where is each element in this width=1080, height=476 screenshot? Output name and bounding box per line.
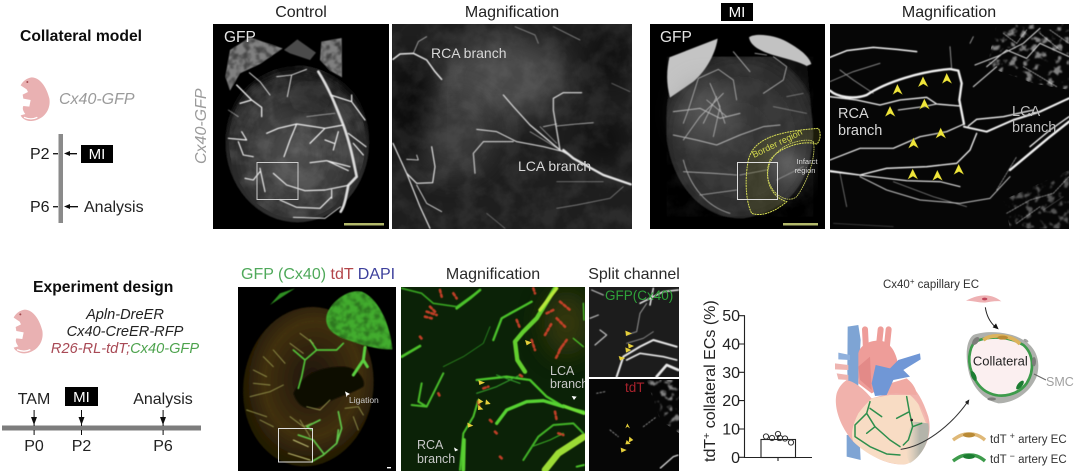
y-axis title: + bbox=[701, 433, 713, 439]
timeline: experiment design: P6 bbox=[153, 438, 173, 455]
timeline: experiment design bbox=[2, 387, 201, 455]
label: tdT: tdT bbox=[625, 380, 645, 395]
bar chart: 50 bbox=[722, 308, 740, 325]
label: Cx40+ capillary EC: Cx40 bbox=[883, 279, 910, 291]
GFP label: GFP bbox=[660, 29, 692, 46]
label: RCA branch bbox=[418, 440, 454, 463]
label: LCA branch: LCA bbox=[1012, 104, 1041, 120]
legend: tdT- artery EC: tdT bbox=[990, 454, 1006, 466]
ligation arrowhead bbox=[345, 391, 350, 397]
bar bbox=[761, 440, 796, 458]
illustration: heart bbox=[835, 325, 930, 464]
side label: Cx40-GFP: Cx40-GFP bbox=[193, 88, 210, 164]
GFP label: GFP bbox=[224, 29, 256, 46]
label: SMC bbox=[1034, 374, 1074, 389]
legend: tdT+ artery EC bbox=[953, 431, 1067, 446]
arrow: capillary to collateral bbox=[985, 307, 999, 329]
bar chart: 0 bbox=[731, 450, 740, 467]
timeline: experiment design: TAM bbox=[18, 391, 50, 408]
panel: split channel GFP bbox=[589, 287, 679, 377]
heading: MI bbox=[721, 3, 753, 21]
title: Collateral model: Collateral model bbox=[20, 28, 142, 45]
MI label bbox=[65, 387, 98, 406]
label: RCA branch bbox=[838, 108, 882, 135]
heading: MI: MI bbox=[729, 4, 745, 21]
label: Border region: Border region bbox=[750, 127, 804, 160]
scale bar bbox=[344, 223, 384, 226]
timeline: collateral model bbox=[30, 134, 144, 223]
MI label: MI bbox=[89, 146, 105, 163]
bar chart: 30 bbox=[722, 365, 740, 382]
legend: tdT+ artery EC: + bbox=[1010, 431, 1015, 441]
label: Infarct region: region bbox=[795, 166, 815, 175]
arrowheads bbox=[885, 73, 964, 181]
legend: tdT+ artery EC: tdT bbox=[990, 434, 1006, 446]
vena cava bbox=[847, 325, 861, 413]
label: genotype: Apln-DreER bbox=[85, 307, 164, 323]
panel: MI magnification bbox=[830, 24, 1069, 229]
label: genotype bbox=[51, 307, 199, 357]
aorta bbox=[858, 329, 898, 393]
data points bbox=[763, 431, 794, 445]
illustration: collateral cross-section bbox=[967, 332, 1038, 403]
label: RCA branch: branch bbox=[417, 452, 455, 466]
y-axis title: tdT bbox=[702, 439, 719, 462]
ligation label: Ligation bbox=[349, 395, 379, 405]
axes bbox=[739, 316, 812, 461]
heading: Control: Control bbox=[275, 4, 327, 21]
panel: split channel tdT bbox=[589, 379, 679, 471]
label: RCA branch: RCA branch bbox=[431, 45, 506, 61]
label: Infarct region bbox=[795, 158, 818, 174]
label: RCA branch: branch bbox=[838, 123, 882, 139]
coronary vessels bbox=[855, 397, 922, 455]
legend: tdT+ artery EC: artery EC bbox=[1015, 434, 1067, 446]
icon: neonatal mouse bbox=[14, 310, 43, 353]
inset box bbox=[738, 162, 778, 200]
pulmonary pink branches bbox=[835, 363, 848, 380]
heading: Magnification (control): Magnification bbox=[465, 4, 559, 21]
y-axis title: collateral ECs (%) bbox=[702, 300, 719, 433]
label: RCA branch: RCA bbox=[417, 438, 444, 452]
label: LCA branch: branch bbox=[1012, 120, 1056, 136]
label: genotype: R26-RL-tdT;Cx40-GFP bbox=[51, 341, 199, 357]
heading: Magnification: Magnification bbox=[446, 266, 540, 283]
title: Experiment design: Experiment design bbox=[33, 279, 173, 296]
panel: MI GFP heart bbox=[650, 24, 825, 229]
label: genotype: Cx40-CreER-RFP bbox=[67, 324, 184, 340]
bar chart bbox=[701, 300, 812, 467]
label: LCA branch: branch bbox=[550, 377, 588, 391]
inset box bbox=[278, 428, 312, 462]
legend: tdT- artery EC: artery EC bbox=[1015, 454, 1067, 466]
label: Cx40+ capillary EC: + bbox=[910, 277, 915, 286]
panel: merged magnification bbox=[401, 287, 590, 471]
bar chart: 20 bbox=[722, 393, 740, 410]
timeline: collateral model: P6 bbox=[30, 199, 50, 216]
label: Cx40+ capillary EC: capillary EC bbox=[914, 279, 979, 291]
label: LCA branch bbox=[1012, 106, 1056, 132]
panel: Control GFP heart bbox=[213, 24, 389, 229]
atrium and pulmonary artery bbox=[887, 378, 917, 395]
label: LCA branch: LCA branch bbox=[518, 158, 591, 174]
infarct zone bbox=[906, 422, 929, 463]
timeline: collateral model: P2 bbox=[30, 146, 50, 163]
label: RCA branch: RCA bbox=[838, 106, 869, 122]
label: LCA branch: LCA bbox=[550, 364, 575, 378]
label: GFP (Cx40): GFP(Cx40) bbox=[605, 288, 673, 303]
inset box bbox=[257, 162, 298, 200]
heading: GFP (Cx40) tdT DAPI: GFP (Cx40) tdT DAPI bbox=[241, 266, 395, 283]
timeline: experiment design: P0 bbox=[24, 438, 44, 455]
arrow: heart to collateral bbox=[901, 399, 969, 449]
legend: tdT- artery EC: − bbox=[1010, 451, 1015, 461]
label: SMC: SMC bbox=[1046, 375, 1074, 389]
label: LCA branch bbox=[550, 366, 585, 388]
label: Infarct region: Infarct bbox=[797, 157, 818, 166]
MI label: MI bbox=[73, 389, 90, 406]
scale bar bbox=[783, 223, 818, 226]
bar chart: 40 bbox=[722, 336, 740, 354]
legend: tdT- artery EC bbox=[953, 451, 1067, 466]
heart body bbox=[836, 380, 930, 464]
border and infarct outlines bbox=[746, 128, 820, 215]
label: Cx40-GFP strain: Cx40-GFP bbox=[59, 91, 135, 108]
scale bar bbox=[387, 467, 391, 468]
bar chart: 10 bbox=[722, 422, 740, 438]
timeline: experiment design: Analysis bbox=[133, 391, 193, 408]
heading: Magnification (MI): Magnification bbox=[902, 4, 996, 21]
icon: capillary EC cell bbox=[966, 295, 1001, 303]
heading: Split channel: Split channel bbox=[588, 266, 680, 283]
panel: merged heart bbox=[233, 287, 396, 475]
panel: Control magnification bbox=[392, 24, 632, 229]
label: Collateral: Collateral bbox=[973, 353, 1028, 368]
icon: neonatal mouse bbox=[21, 77, 50, 121]
timeline: collateral model: Analysis bbox=[84, 199, 144, 216]
timeline: experiment design: P2 bbox=[72, 438, 91, 455]
